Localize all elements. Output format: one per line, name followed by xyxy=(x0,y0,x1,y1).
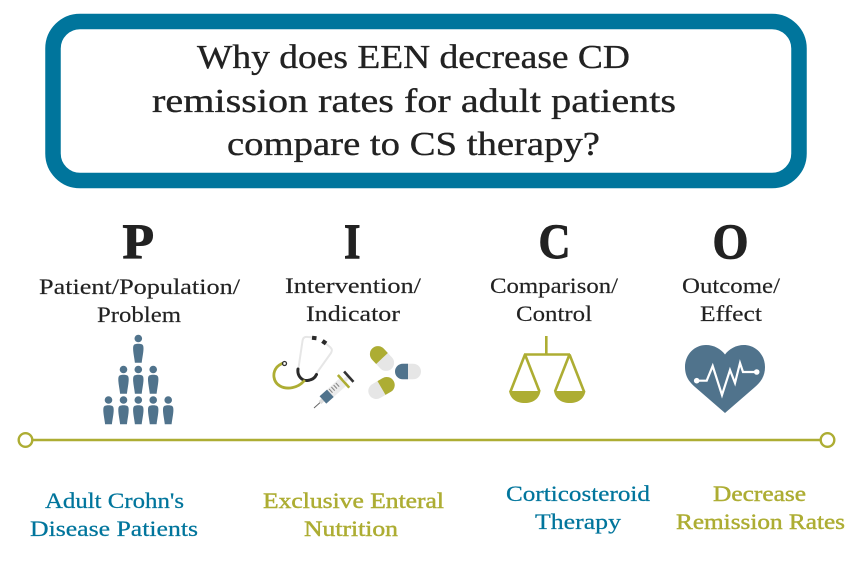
answer: outcome: Remission Rates xyxy=(676,509,845,534)
answer: population: Disease Patients xyxy=(30,516,198,541)
answer: intervention xyxy=(263,488,444,541)
column I: intervention xyxy=(274,213,422,414)
answer: comparison: Corticosteroid xyxy=(506,481,650,506)
label: comparison/control: Comparison/ xyxy=(490,273,619,298)
label: intervention/indicator: Intervention/ xyxy=(285,273,422,298)
title xyxy=(152,39,676,163)
timeline start node xyxy=(19,433,32,447)
answer: comparison: Therapy xyxy=(535,509,621,534)
title: Why does EEN decrease CD xyxy=(197,39,630,76)
answer: outcome: Decrease xyxy=(713,481,806,506)
pill: top olive xyxy=(367,343,397,374)
icon: syringe xyxy=(308,369,355,414)
icon: balance scale xyxy=(509,336,586,403)
icon: people pyramid xyxy=(103,335,173,424)
answer: intervention: Nutrition xyxy=(304,516,398,541)
answer: intervention: Exclusive Enteral xyxy=(263,488,444,513)
answer: comparison xyxy=(506,481,650,534)
answer: population xyxy=(30,488,198,541)
column P: patient xyxy=(39,213,241,424)
label: outcome/effect: Effect xyxy=(700,301,762,326)
label: patient/population/problem xyxy=(39,274,241,327)
label: patient/population/problem: Problem xyxy=(97,302,181,327)
letter C: C xyxy=(538,213,570,269)
timeline xyxy=(19,433,834,447)
label: comparison/control xyxy=(490,273,619,326)
column C: comparison xyxy=(490,213,619,403)
label: outcome/effect: Outcome/ xyxy=(682,273,781,298)
answer: outcome xyxy=(676,481,845,534)
letter O: O xyxy=(712,213,748,269)
timeline end node xyxy=(821,433,834,447)
panel frame xyxy=(53,22,799,180)
label: intervention/indicator xyxy=(285,273,422,326)
label: comparison/control: Control xyxy=(516,301,592,326)
column O: outcome xyxy=(682,213,781,413)
title: remission rates for adult patients xyxy=(152,83,676,120)
pill: bottom olive xyxy=(365,374,398,402)
icon: pills xyxy=(365,343,421,402)
letter I: I xyxy=(344,213,360,269)
icon: stethoscope xyxy=(274,336,332,388)
label: intervention/indicator: Indicator xyxy=(306,301,401,326)
label: patient/population/problem: Patient/Population/ xyxy=(39,274,241,299)
question panel xyxy=(53,22,799,180)
icon: heart with pulse xyxy=(685,345,765,413)
pill: right blue xyxy=(395,364,421,379)
title: compare to CS therapy? xyxy=(227,126,600,163)
letter P: P xyxy=(122,213,154,269)
label: outcome/effect xyxy=(682,273,781,326)
answer: population: Adult Crohn's xyxy=(45,488,184,513)
